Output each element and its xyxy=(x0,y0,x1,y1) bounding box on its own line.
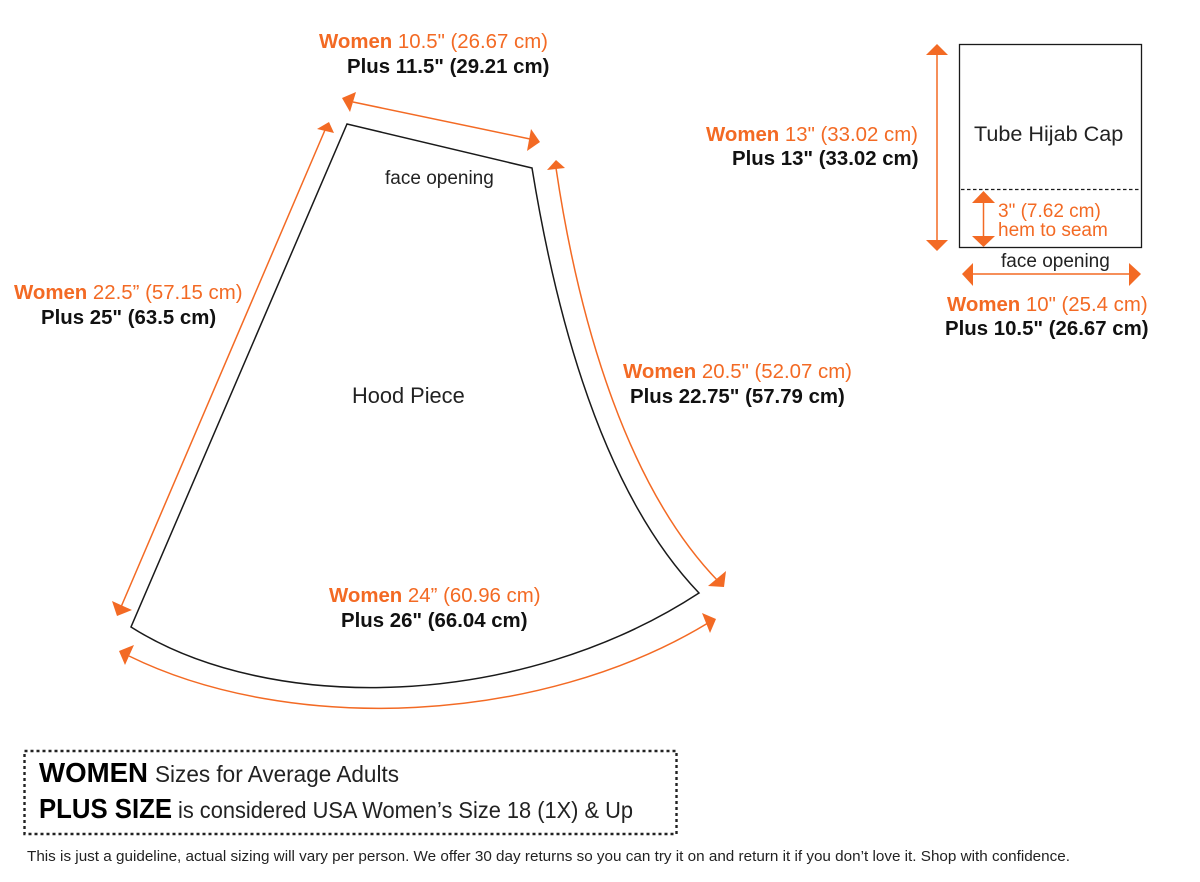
arrow: cap face opening xyxy=(962,263,1141,286)
measurement: hem to seam: hem to seam xyxy=(998,220,1108,241)
measurement: cap face opening: Women 10" (25.4 cm) xyxy=(947,294,1148,316)
measurement: cap face opening: Plus 10.5" (26.67 cm) xyxy=(945,318,1148,340)
label: face opening of hood: face opening xyxy=(385,168,494,189)
measurement: cap face opening xyxy=(945,294,1148,340)
measurement: cap height: Plus 13" (33.02 cm) xyxy=(732,148,918,170)
measurement: right edge xyxy=(623,361,852,408)
measurement: left edge xyxy=(14,282,243,329)
measurement: bottom edge: Women 24” (60.96 cm) xyxy=(329,585,541,607)
callout: size definitions: is considered USA Women’s Size 18 (1X) & Up xyxy=(178,797,633,823)
measurement: hem to seam: 3" (7.62 cm) xyxy=(998,201,1101,222)
callout: size definitions: PLUS SIZE xyxy=(39,793,172,824)
callout: size definitions: Sizes for Average Adults xyxy=(155,761,399,787)
arrow: bottom edge xyxy=(119,613,716,708)
arrow: right edge xyxy=(547,160,726,587)
arrow: top edge xyxy=(342,92,540,151)
measurement: top edge xyxy=(319,31,549,78)
measurement: bottom edge: Plus 26" (66.04 cm) xyxy=(341,610,527,632)
measurement: left edge: Plus 25" (63.5 cm) xyxy=(41,307,216,329)
measurement: cap height: Women 13" (33.02 cm) xyxy=(706,124,918,146)
disclaimer text: This is just a guideline, actual sizing will vary per person. We offer 30 day returns so you can try it on and return it if you don’t love it. Shop with confidence. xyxy=(27,848,1070,865)
tube hijab cap panel xyxy=(960,44,1142,248)
arrow: left edge xyxy=(112,122,334,616)
measurement: hem to seam xyxy=(998,201,1108,241)
measurement: cap height xyxy=(706,124,918,170)
measurement: top edge: Women 10.5" (26.67 cm) xyxy=(319,31,548,53)
hood piece outline xyxy=(131,124,699,688)
arrow: cap height xyxy=(926,44,948,251)
callout: size definitions xyxy=(24,751,676,834)
measurement: right edge: Plus 22.75" (57.79 cm) xyxy=(630,386,845,408)
label: cap face opening: face opening xyxy=(1001,251,1110,272)
arrow: hem to seam xyxy=(972,191,995,247)
measurement: right edge: Women 20.5" (52.07 cm) xyxy=(623,361,852,383)
label: hood piece: Hood Piece xyxy=(352,383,465,408)
measurement: left edge: Women 22.5” (57.15 cm) xyxy=(14,282,243,304)
measurement: bottom edge xyxy=(329,585,541,632)
measurement: top edge: Plus 11.5" (29.21 cm) xyxy=(347,56,549,78)
callout: size definitions: WOMEN xyxy=(39,757,148,788)
label: tube hijab cap: Tube Hijab Cap xyxy=(974,121,1123,146)
